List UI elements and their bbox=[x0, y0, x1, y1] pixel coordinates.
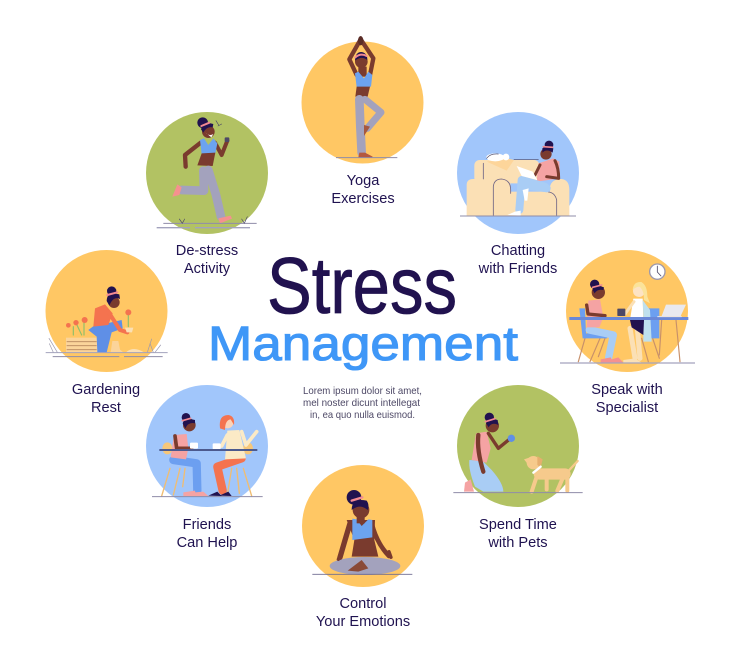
label: Gardening Rest: Gardening bbox=[72, 382, 140, 398]
label: Yoga Exercises: Yoga bbox=[347, 173, 380, 189]
label: De-stress Activity: Activity bbox=[184, 261, 231, 277]
illustration: woman running bbox=[157, 117, 257, 228]
label: Control Your Emotions bbox=[316, 596, 410, 630]
circle: friends background bbox=[146, 385, 268, 507]
heading: Management: Management bbox=[208, 318, 518, 371]
label: Spend Time with Pets: Spend Time bbox=[479, 517, 557, 533]
panel: spend time with pets bbox=[453, 385, 583, 551]
label: Yoga Exercises: Exercises bbox=[331, 191, 395, 207]
title: Stress Management bbox=[208, 241, 518, 371]
circle: specialist background bbox=[566, 250, 688, 372]
label: Gardening Rest: Rest bbox=[91, 400, 121, 416]
illustration: woman on couch with cat and laptop bbox=[460, 141, 576, 216]
illustration: two women at desk with clock and laptop bbox=[560, 264, 695, 363]
panel: chatting with friends bbox=[457, 112, 579, 277]
text block: lorem ipsum description: in, ea quo nulla euismod. bbox=[310, 410, 415, 421]
label: Speak with Specialist: Specialist bbox=[596, 400, 658, 416]
label: Speak with Specialist: Speak with bbox=[591, 382, 663, 398]
label: De-stress Activity: De-stress bbox=[176, 243, 238, 259]
panel: speak with specialist bbox=[560, 250, 695, 416]
panel: yoga exercises bbox=[302, 36, 424, 207]
illustration: woman gardening with flowers bbox=[46, 286, 168, 357]
illustration: woman meditating bbox=[312, 490, 412, 575]
icon: wall clock bbox=[650, 264, 665, 279]
text block: lorem ipsum description bbox=[303, 386, 422, 421]
illustration: woman playing with dog bbox=[453, 413, 583, 493]
label: Spend Time with Pets: with Pets bbox=[487, 535, 548, 551]
circle: gardening background bbox=[46, 250, 168, 372]
label: Friends Can Help: Friends bbox=[183, 517, 231, 533]
circle: de-stress background bbox=[146, 112, 268, 234]
label: Yoga Exercises bbox=[331, 173, 395, 207]
circle: pets background bbox=[457, 385, 579, 507]
label: Spend Time with Pets bbox=[479, 517, 557, 551]
label: Chatting with Friends: with Friends bbox=[478, 261, 557, 277]
label: Chatting with Friends bbox=[478, 243, 557, 277]
illustration: woman in tree pose bbox=[336, 36, 397, 158]
label: Control Your Emotions: Your Emotions bbox=[316, 614, 410, 630]
icon: blue ball bbox=[508, 435, 515, 442]
label: De-stress Activity bbox=[176, 243, 238, 277]
panel: control your emotions bbox=[302, 465, 424, 630]
circle: meditation background bbox=[302, 465, 424, 587]
panel: de-stress activity bbox=[146, 112, 268, 277]
text block: lorem ipsum description: Lorem ipsum dolor sit amet, bbox=[303, 386, 422, 397]
label: Friends Can Help: Can Help bbox=[177, 535, 237, 551]
panel: friends can help bbox=[146, 385, 268, 551]
label: Control Your Emotions: Control bbox=[339, 596, 387, 612]
heading: Stress: Stress bbox=[267, 241, 457, 330]
label: Speak with Specialist bbox=[591, 382, 663, 416]
circle: chatting background bbox=[457, 112, 579, 234]
illustration: two friends with coffee at a table bbox=[152, 413, 263, 497]
label: Gardening Rest bbox=[72, 382, 140, 416]
text block: lorem ipsum description: mel noster dicunt intellegat bbox=[303, 398, 420, 409]
label: Chatting with Friends: Chatting bbox=[491, 243, 545, 259]
label: Friends Can Help bbox=[177, 517, 237, 551]
circle: yoga background bbox=[302, 42, 424, 164]
panel: gardening rest bbox=[46, 250, 168, 416]
